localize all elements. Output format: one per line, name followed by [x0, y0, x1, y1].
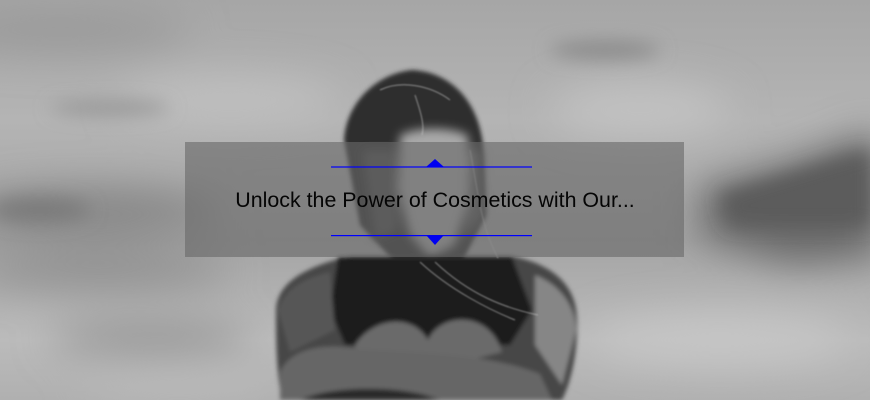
- figure: forehead and face: [362, 129, 484, 258]
- overlay panel background: [185, 142, 684, 257]
- figure: hair: [344, 70, 486, 262]
- figure: shoulders and arms: [276, 256, 577, 400]
- figure: wet hair strands: [380, 85, 538, 320]
- heading: Unlock the Power of Cosmetics with Our...: [235, 188, 635, 212]
- top ornament: line and diamond: [331, 159, 532, 168]
- title overlay panel: [185, 142, 684, 257]
- bottom ornament: line and diamond: [331, 235, 532, 245]
